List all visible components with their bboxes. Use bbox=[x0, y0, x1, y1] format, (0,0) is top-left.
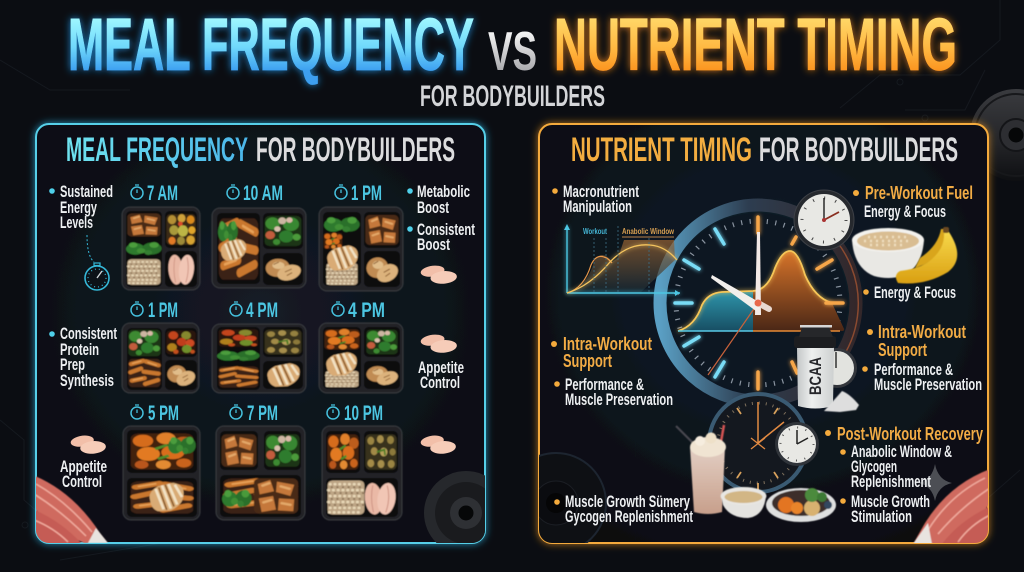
small oat bowl bbox=[720, 487, 766, 518]
text: intra-workout support right bbox=[867, 321, 966, 360]
text: muscle growth left bbox=[554, 492, 693, 526]
milkshake bbox=[676, 425, 726, 514]
benefit: consistent protein synthesis: Consistent bbox=[60, 324, 117, 343]
small clock: lower bbox=[775, 422, 819, 466]
benefit: appetite control right: Appetite bbox=[418, 358, 464, 377]
second small clock bbox=[817, 348, 857, 388]
text: anabolic window: Anabolic Window & bbox=[851, 442, 952, 461]
meal container: 7 PM bbox=[216, 426, 305, 520]
BCAA shaker: BCAA bbox=[806, 357, 825, 395]
text: performance left bbox=[554, 375, 673, 409]
text: pre-workout fuel bbox=[853, 182, 973, 221]
text: pre-workout fuel: Energy & Focus bbox=[864, 202, 946, 221]
nutrient graph bbox=[564, 224, 680, 296]
icon: weight plate bbox=[539, 452, 607, 543]
meal container: 4 PM bbox=[212, 324, 306, 393]
icon: muscle bbox=[913, 468, 993, 544]
benefit: appetite control right: Control bbox=[420, 373, 460, 392]
icon: sparkle bbox=[919, 464, 952, 501]
benefit: appetite control left: Control bbox=[62, 472, 102, 491]
text: intra-workout support right: Intra-Workout bbox=[878, 321, 966, 342]
text: performance right bbox=[862, 360, 982, 394]
benefit: metabolic boost: Boost bbox=[417, 198, 449, 217]
time label: 7 AM bbox=[131, 182, 178, 205]
icon: chicken left bbox=[68, 434, 108, 455]
text: anabolic window: Replenishment bbox=[851, 472, 931, 491]
benefit: sustained energy levels bbox=[49, 182, 113, 232]
subtitle: FOR BODYBUILDERS bbox=[420, 80, 605, 113]
time label: 10 AM bbox=[227, 182, 283, 205]
clock minor ticks bbox=[676, 221, 840, 385]
lower clock bbox=[709, 394, 807, 492]
benefit: consistent protein synthesis: Synthesis bbox=[60, 371, 114, 390]
text: anabolic window bbox=[840, 442, 952, 491]
time label: 4 PM second: 4 PM bbox=[348, 299, 385, 322]
panel: meal frequency bbox=[30, 124, 508, 555]
benefit: sustained energy levels: Sustained bbox=[60, 182, 113, 201]
benefit: sustained energy levels: Energy bbox=[60, 198, 97, 217]
benefit: sustained energy levels: Levels bbox=[60, 213, 93, 232]
nutrient graph: Workout bbox=[583, 227, 607, 236]
text: macronutrient manipulation: Macronutrient bbox=[563, 182, 639, 201]
text: intra-workout support left: Support bbox=[563, 350, 612, 371]
text: pre-workout fuel: Pre-Workout Fuel bbox=[865, 182, 973, 203]
timing curve bbox=[678, 251, 845, 375]
title: vs: VS bbox=[488, 20, 537, 82]
time label: 10 PM: 10 PM bbox=[344, 402, 383, 425]
benefit: appetite control right bbox=[418, 358, 464, 392]
nutrient graph: Anabolic Window bbox=[622, 227, 675, 236]
text: energy and focus: Energy & Focus bbox=[874, 283, 956, 302]
clock hands bbox=[711, 232, 769, 315]
time label: 1 PM: 1 PM bbox=[351, 182, 382, 205]
benefit: metabolic boost: Metabolic bbox=[417, 182, 470, 201]
text: muscle growth left: Muscle Growth Sümery bbox=[565, 492, 690, 511]
text: muscle growth stimulation bbox=[840, 492, 930, 526]
benefit: consistent boost: Boost bbox=[417, 235, 450, 254]
text: muscle growth stimulation: Stimulation bbox=[851, 507, 912, 526]
panel frame bbox=[36, 124, 485, 543]
meal container: 5 PM bbox=[123, 426, 200, 520]
protein powder bbox=[824, 391, 859, 412]
banana bbox=[896, 227, 957, 284]
panel heading: MEAL FREQUENCY bbox=[66, 131, 248, 169]
meal container: 10 PM bbox=[322, 426, 402, 520]
time label: 4 PM bbox=[230, 299, 278, 322]
meal container: 10 AM bbox=[212, 208, 306, 288]
time label: 1 PM row two: 1 PM bbox=[148, 299, 178, 322]
text: anabolic window: Glycogen bbox=[851, 457, 897, 476]
time label: 4 PM: 4 PM bbox=[246, 299, 278, 322]
benefit: consistent protein synthesis: Protein bbox=[60, 340, 99, 359]
text: intra-workout support right: Support bbox=[878, 339, 927, 360]
text: muscle growth left: Gycogen Replenishment bbox=[565, 507, 693, 526]
time label: 7 AM: 7 AM bbox=[147, 182, 178, 205]
icon: stopwatch bbox=[85, 235, 109, 290]
panel heading: FOR BODYBUILDERS bbox=[256, 131, 455, 169]
time label: 5 PM bbox=[131, 402, 179, 425]
icon: chicken right upper bbox=[418, 264, 459, 285]
time label: 1 PM row two bbox=[131, 299, 178, 322]
benefit: appetite control left: Appetite bbox=[60, 457, 107, 476]
meal container: 7 AM bbox=[122, 207, 200, 290]
text: performance left: Muscle Preservation bbox=[565, 390, 673, 409]
clipped panel art: muscle and weight bbox=[36, 471, 485, 543]
clock bright ticks bbox=[675, 217, 843, 389]
text: performance right: Performance & bbox=[874, 360, 953, 379]
icon: chicken right middle bbox=[418, 333, 459, 354]
icon: muscle bbox=[36, 476, 108, 543]
text: muscle growth stimulation: Muscle Growth bbox=[851, 492, 930, 511]
benefit: appetite control left bbox=[60, 457, 107, 491]
food plate bbox=[766, 488, 836, 522]
benefit: consistent boost bbox=[407, 220, 475, 254]
small clock: top bbox=[794, 190, 854, 250]
time label: 1 PM bbox=[335, 182, 382, 205]
benefit: consistent boost: Consistent bbox=[417, 220, 475, 239]
panel heading: NUTRIENT TIMING bbox=[571, 131, 752, 169]
text: macronutrient manipulation: Manipulation bbox=[563, 197, 632, 216]
benefit: consistent protein synthesis: Prep bbox=[60, 355, 85, 374]
main title bbox=[68, 3, 957, 113]
title: meal frequency: MEAL FREQUENCY bbox=[68, 3, 474, 86]
weight plate: top right bbox=[970, 89, 1024, 181]
meal container: 1 PM bbox=[319, 207, 403, 291]
benefit: consistent protein synthesis bbox=[49, 324, 117, 390]
meal container: 4 PM second bbox=[319, 323, 403, 393]
icon: chicken right lower bbox=[418, 434, 458, 455]
text: performance left: Performance & bbox=[565, 375, 644, 394]
BCAA shaker bbox=[794, 325, 836, 408]
time label: 4 PM second bbox=[332, 299, 385, 322]
panel frame bbox=[539, 124, 988, 543]
time label: 7 PM bbox=[230, 402, 278, 425]
text: energy and focus bbox=[863, 283, 956, 302]
text: intra-workout support left: Intra-Workout bbox=[563, 333, 652, 354]
time label: 10 AM: 10 AM bbox=[243, 182, 283, 205]
icon: weight plate bbox=[424, 471, 485, 543]
main clock bbox=[660, 205, 858, 401]
meal container: 1 PM row two bbox=[122, 323, 199, 393]
oat bowl bbox=[852, 228, 924, 278]
text: intra-workout support left bbox=[551, 333, 652, 371]
time label: 10 PM bbox=[327, 402, 383, 425]
time label: 5 PM: 5 PM bbox=[148, 402, 179, 425]
benefit: metabolic boost bbox=[407, 182, 470, 217]
clipped art: weight and muscle bbox=[539, 452, 988, 543]
text: macronutrient manipulation bbox=[552, 182, 639, 216]
time label: 7 PM: 7 PM bbox=[247, 402, 278, 425]
panel: nutrient timing bbox=[506, 124, 993, 553]
